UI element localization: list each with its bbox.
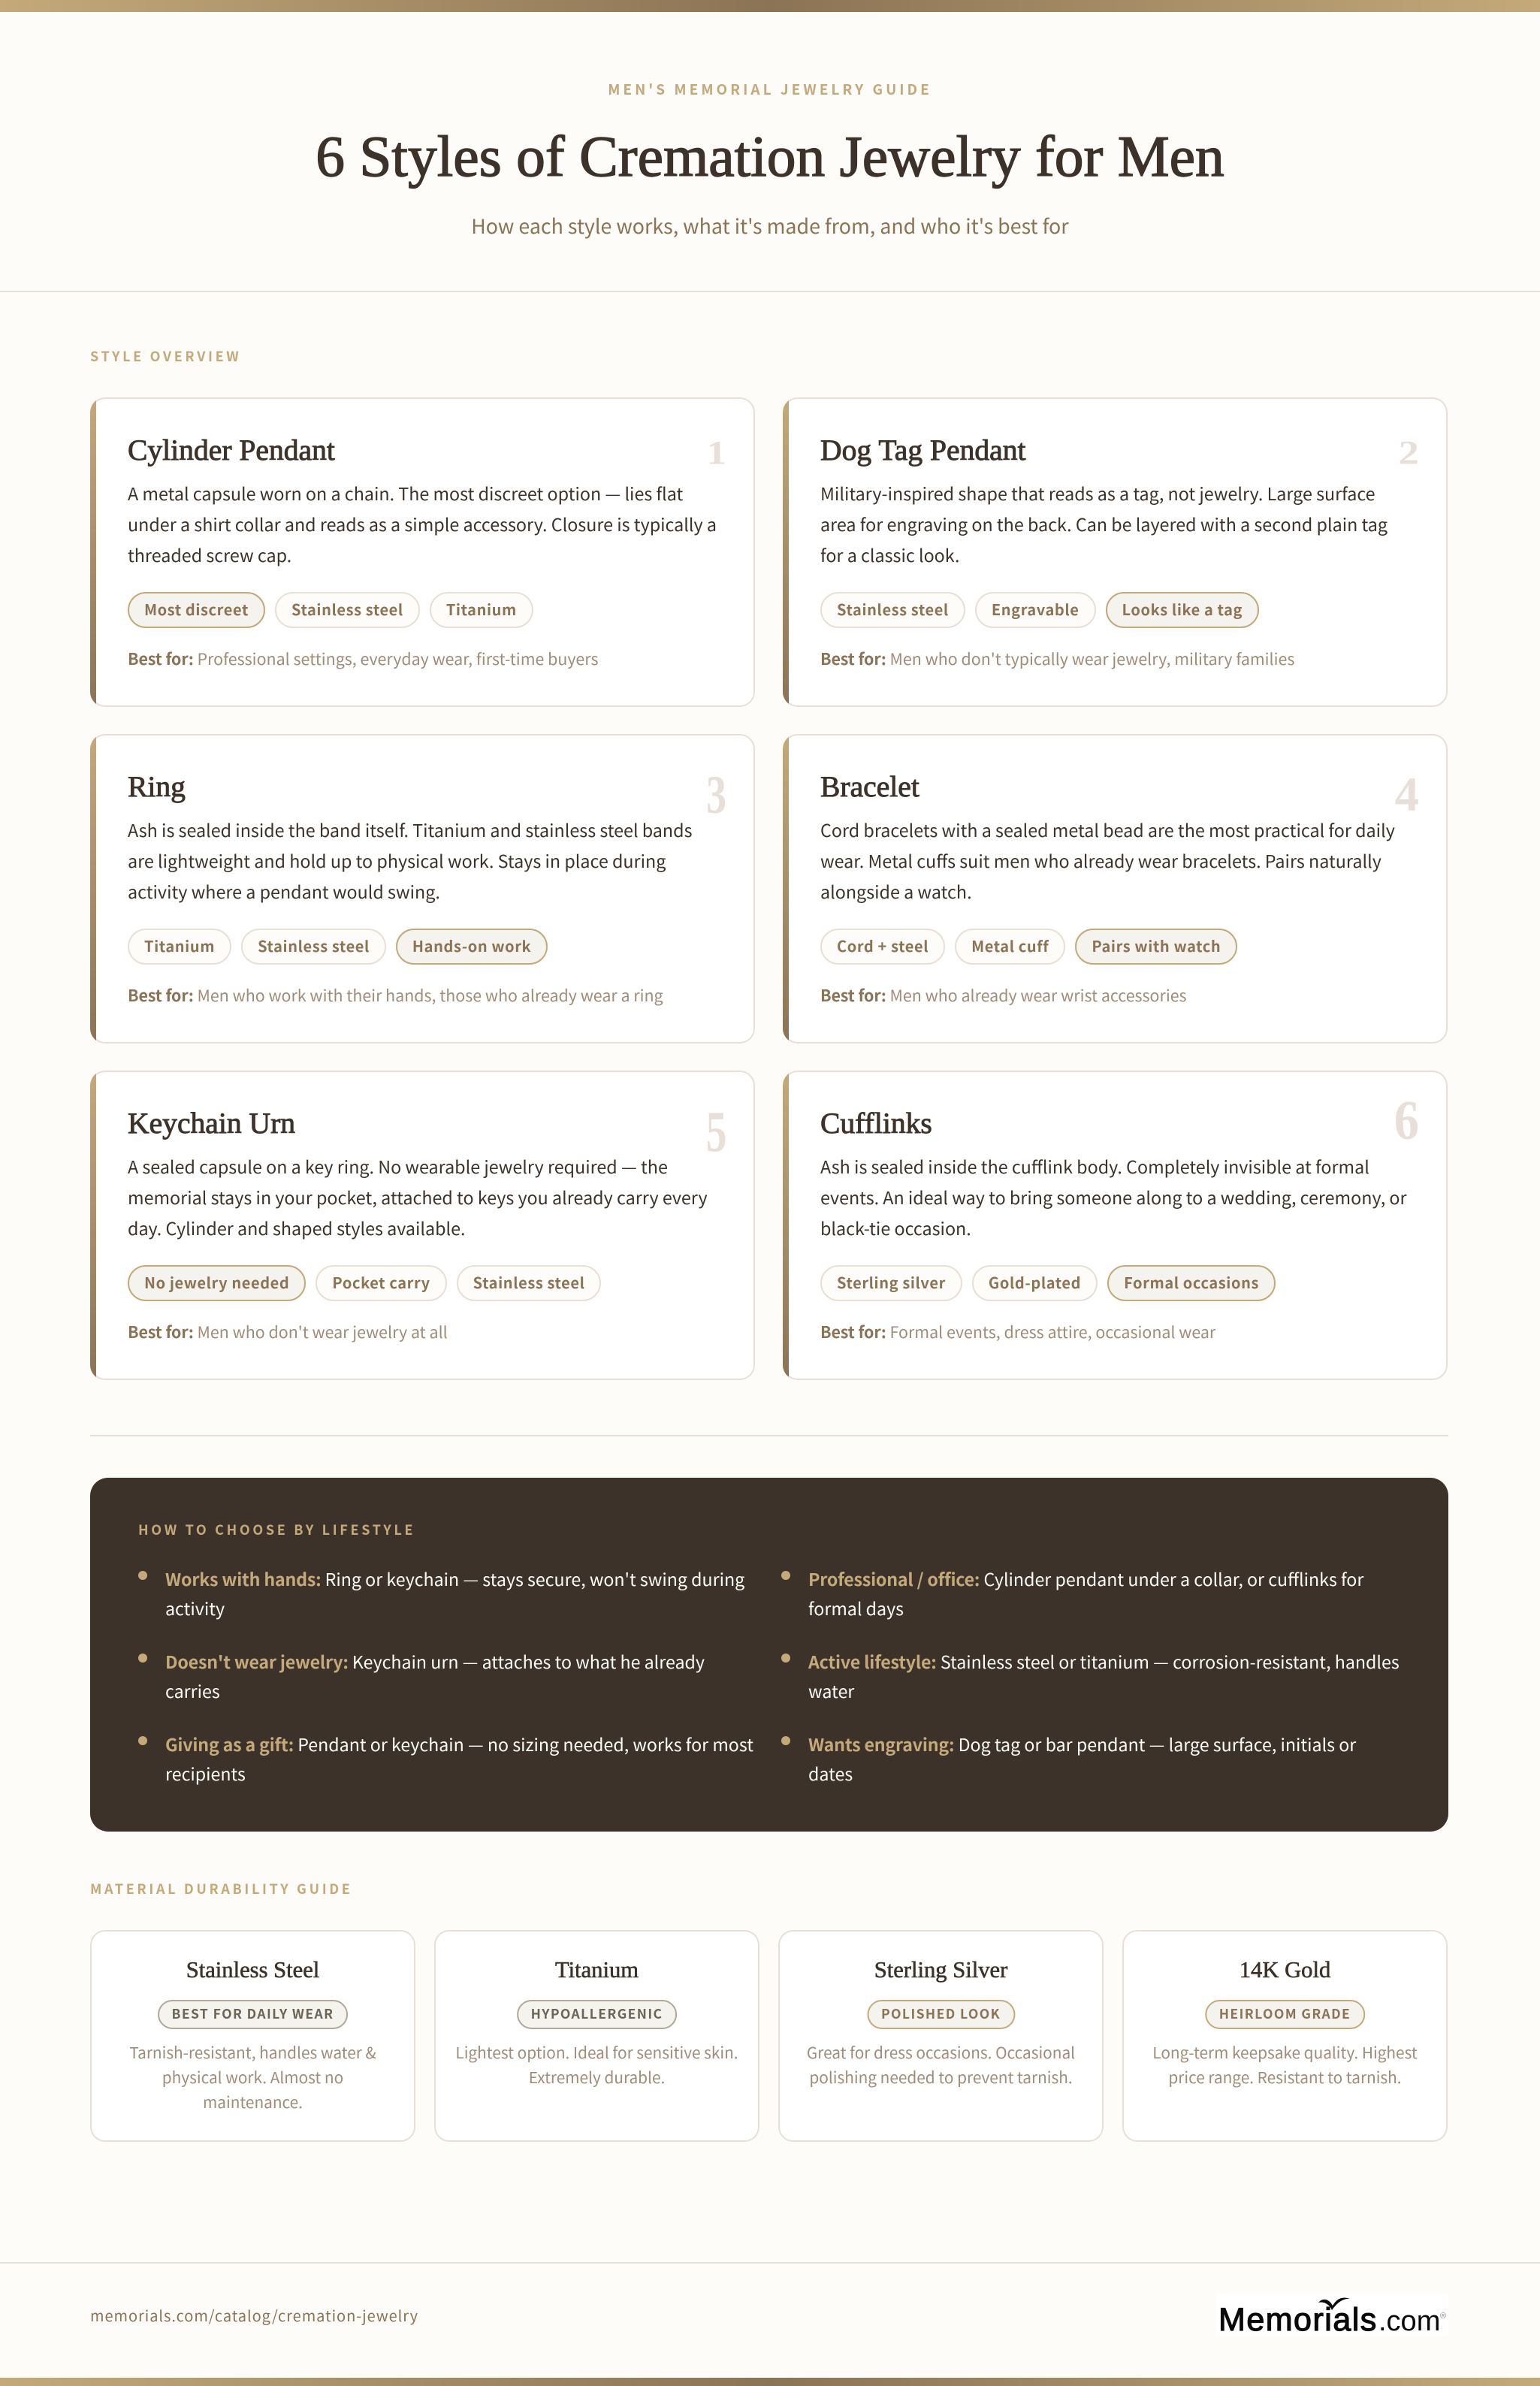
material description: Extremely durable. — [529, 2065, 665, 2088]
material badge — [517, 2000, 677, 2029]
card description: A sealed capsule on a key ring. No wearable jewelry required — the — [128, 1153, 668, 1179]
card tags: No jewelry needed — [144, 1271, 289, 1293]
material badge: BEST FOR DAILY WEAR — [172, 2004, 334, 2023]
card description: black-tie occasion. — [820, 1215, 971, 1240]
card tags: Engravable — [992, 598, 1079, 620]
card tags — [128, 929, 548, 965]
card description: A metal capsule worn on a chain. The most discreet option — lies flat — [128, 480, 683, 506]
card title: Ring — [128, 770, 186, 803]
card: keychain urn — [90, 1071, 755, 1380]
material name: Stainless Steel — [186, 1957, 319, 1983]
card title: Cufflinks — [820, 1107, 932, 1140]
material description: Great for dress occasions. Occasional — [807, 2040, 1075, 2063]
card title: Dog Tag Pendant — [820, 433, 1026, 467]
card tags: Stainless steel — [258, 935, 370, 956]
section label: material durability guide: MATERIAL DURABILITY GUIDE — [90, 1879, 353, 1898]
card title: Keychain Urn — [128, 1107, 295, 1140]
panel heading: HOW TO CHOOSE BY LIFESTYLE — [138, 1520, 415, 1539]
material description — [455, 2040, 738, 2088]
material badge: HYPOALLERGENIC — [531, 2004, 663, 2023]
footer url: memorials.com/catalog/cremation-jewelry — [90, 2304, 418, 2326]
logo: memorials.com — [1216, 2294, 1448, 2336]
material description: maintenance. — [203, 2090, 303, 2113]
card description: activity where a pendant would swing. — [128, 878, 440, 904]
header — [0, 12, 1540, 292]
card description — [128, 1153, 708, 1240]
card: cylinder pendant — [90, 397, 755, 707]
section label: style overview: STYLE OVERVIEW — [90, 346, 241, 366]
card description: memorial stays in your pocket, attached to keys you already carry every — [128, 1184, 708, 1210]
card description: Ash is sealed inside the band itself. Titanium and stainless steel bands — [128, 817, 693, 842]
card description: are lightweight and hold up to physical work. Stays in place during — [128, 847, 666, 873]
card tags: Stainless steel — [473, 1271, 584, 1293]
item: wants engraving — [781, 1731, 1357, 1786]
card tags: Stainless steel — [837, 598, 949, 620]
material badge: POLISHED LOOK — [881, 2004, 1001, 2023]
material description: Tarnish-resistant, handles water & — [129, 2040, 376, 2063]
best for: Best for: Men who work with their hands, those who already wear a ring — [128, 983, 663, 1007]
card tags: Formal occasions — [1124, 1271, 1259, 1293]
item: doesn't wear jewelry: Doesn't wear jewelry: Keychain urn — attaches to what he already — [165, 1648, 705, 1674]
material card: titanium — [434, 1930, 759, 2142]
item: works with hands: Works with hands: Ring or keychain — stays secure, won't swing during — [165, 1566, 744, 1591]
card description: wear. Metal cuffs suit men who already wear bracelets. Pairs naturally — [820, 847, 1381, 873]
item: doesn't wear jewelry: carries — [165, 1678, 220, 1703]
item: wants engraving: Wants engraving: Dog tag or bar pendant — large surface, initials or — [808, 1731, 1356, 1756]
material description — [1152, 2040, 1418, 2088]
card tags: Pairs with watch — [1092, 935, 1221, 956]
material name: Titanium — [555, 1957, 639, 1983]
material card: stainless steel — [90, 1930, 415, 2142]
card title: Bracelet — [820, 770, 919, 803]
card: cufflinks — [783, 1071, 1448, 1380]
item: active lifestyle — [781, 1648, 1400, 1703]
card number: 5 — [705, 1099, 726, 1164]
icon: bird — [1318, 2297, 1350, 2310]
material description: price range. Resistant to tarnish. — [1168, 2065, 1402, 2088]
card tags — [820, 1265, 1276, 1301]
eyebrow: MEN'S MEMORIAL JEWELRY GUIDE — [608, 79, 932, 99]
card description: for a classic look. — [820, 542, 959, 567]
material description: Long-term keepsake quality. Highest — [1152, 2040, 1418, 2063]
card tags: Looks like a tag — [1122, 598, 1243, 620]
card description: alongside a watch. — [820, 878, 972, 904]
subtitle: How each style works, what it's made from, and who it's best for — [471, 210, 1069, 240]
card description: area for engraving on the back. Can be layered with a second plain tag — [820, 511, 1388, 536]
material badge — [158, 2000, 348, 2029]
card tags: Titanium — [144, 935, 215, 956]
material description — [129, 2040, 376, 2113]
material name: 14K Gold — [1240, 1957, 1330, 1983]
card description: events. An ideal way to bring someone along to a wedding, ceremony, or — [820, 1184, 1407, 1210]
material description — [807, 2040, 1075, 2088]
card tags: Sterling silver — [837, 1271, 946, 1293]
best for: Best for: Men who don't typically wear jewelry, military families — [820, 647, 1294, 670]
card description — [820, 480, 1388, 567]
panel: how to choose by lifestyle — [90, 1478, 1448, 1832]
bottom gradient bar — [0, 2378, 1540, 2386]
card tags — [820, 929, 1237, 965]
item: active lifestyle: water — [808, 1678, 854, 1703]
card tags: Titanium — [446, 598, 517, 620]
item: giving as a gift: Giving as a gift: Pendant or keychain — no sizing needed, works for most — [165, 1731, 753, 1756]
item: professional / office: Professional / office: Cylinder pendant under a collar, or cufflinks for — [808, 1566, 1363, 1591]
material card: sterling silver — [778, 1930, 1104, 2142]
card number: 3 — [706, 765, 726, 825]
item: works with hands: activity — [165, 1595, 225, 1620]
material badge: HEIRLOOM GRADE — [1219, 2004, 1351, 2023]
card number: 4 — [1394, 768, 1419, 822]
card tags: Cord + steel — [837, 935, 929, 956]
best for: Best for: Professional settings, everyday wear, first-time buyers — [128, 647, 598, 670]
item: giving as a gift: recipients — [165, 1760, 246, 1786]
item: wants engraving: dates — [808, 1760, 853, 1786]
card tags: Hands-on work — [412, 935, 531, 956]
card tags: Most discreet — [144, 598, 249, 620]
card tags: Metal cuff — [971, 935, 1049, 956]
card description — [820, 1153, 1407, 1240]
card tags: Gold-plated — [989, 1271, 1081, 1293]
material badge — [867, 2000, 1015, 2029]
item: professional / office — [781, 1566, 1364, 1620]
card description: under a shirt collar and reads as a simple accessory. Closure is typically a — [128, 511, 717, 536]
item: active lifestyle: Active lifestyle: Stainless steel or titanium — corrosion-resistant, handles — [808, 1648, 1400, 1674]
card description: day. Cylinder and shaped styles available. — [128, 1215, 466, 1240]
card description: Military-inspired shape that reads as a tag, not jewelry. Large surface — [820, 480, 1375, 506]
material description: Lightest option. Ideal for sensitive skin. — [455, 2040, 738, 2063]
card number: 1 — [707, 434, 726, 471]
item: professional / office: formal days — [808, 1595, 904, 1620]
card description — [820, 817, 1395, 904]
card tags — [128, 592, 533, 628]
card description: Cord bracelets with a sealed metal bead are the most practical for daily — [820, 817, 1395, 842]
card tags — [128, 1265, 601, 1301]
card title: Cylinder Pendant — [128, 433, 335, 467]
card description — [128, 817, 693, 904]
best for: Best for: Men who don't wear jewelry at all — [128, 1320, 448, 1343]
card tags: Stainless steel — [291, 598, 403, 620]
card tags: Pocket carry — [332, 1271, 430, 1293]
card description — [128, 480, 717, 567]
item: giving as a gift — [138, 1731, 753, 1786]
best for: Best for: Men who already wear wrist accessories — [820, 983, 1187, 1007]
logo registered mark: ® — [1440, 2312, 1446, 2321]
card: dog tag pendant — [783, 397, 1448, 707]
card: ring — [90, 734, 755, 1043]
material card: 14k gold — [1122, 1930, 1448, 2142]
best for: Best for: Formal events, dress attire, occasional wear — [820, 1320, 1215, 1343]
top gradient bar — [0, 0, 1540, 12]
material name: Sterling Silver — [874, 1957, 1007, 1983]
card description: Ash is sealed inside the cufflink body. Completely invisible at formal — [820, 1153, 1369, 1179]
title: 6 Styles of Cremation Jewelry for Men — [316, 124, 1224, 189]
card number: 6 — [1394, 1090, 1419, 1152]
material description: physical work. Almost no — [162, 2065, 343, 2088]
card tags — [820, 592, 1259, 628]
material description: polishing needed to prevent tarnish. — [809, 2065, 1073, 2088]
item: doesn't wear jewelry — [138, 1648, 705, 1703]
card number: 2 — [1399, 434, 1419, 471]
material badge — [1205, 2000, 1365, 2029]
item: works with hands — [138, 1566, 744, 1620]
card description: threaded screw cap. — [128, 542, 291, 567]
card: bracelet — [783, 734, 1448, 1043]
